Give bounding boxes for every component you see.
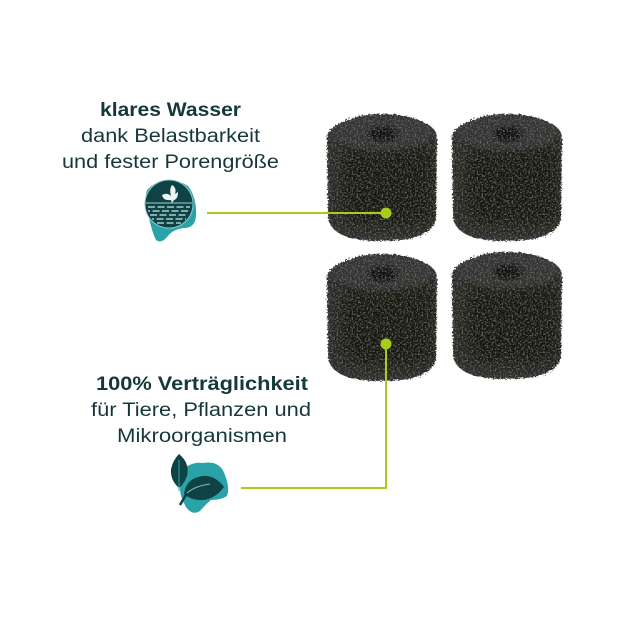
connector line: klares Wasser xyxy=(207,208,392,218)
text block: für Tiere, Pflanzen und Mikroorganismen: für Tiere, Pflanzen und xyxy=(91,400,311,421)
icon: plant above water xyxy=(145,180,196,241)
text block: dank Belastbarkeit und fester Porengröße: dank Belastbarkeit xyxy=(81,126,261,147)
heading: klares Wasser: klares Wasser xyxy=(100,100,242,121)
sponge filter bottom left xyxy=(327,254,437,381)
sponge filter top left xyxy=(327,114,437,241)
connector line: 100% Verträglichkeit xyxy=(241,338,392,488)
sponge filter top right xyxy=(452,114,562,241)
text block: für Tiere, Pflanzen und Mikroorganismen: Mikroorganismen xyxy=(117,426,287,447)
icon: leaves xyxy=(171,454,228,513)
text block: dank Belastbarkeit und fester Porengröße: und fester Porengröße xyxy=(62,152,279,173)
text block: für Tiere, Pflanzen und Mikroorganismen xyxy=(91,400,311,447)
sponge filter bottom right xyxy=(452,252,562,379)
heading: 100% Verträglichkeit: 100% Verträglichkeit xyxy=(96,374,309,395)
text block: dank Belastbarkeit und fester Porengröße xyxy=(62,126,279,173)
